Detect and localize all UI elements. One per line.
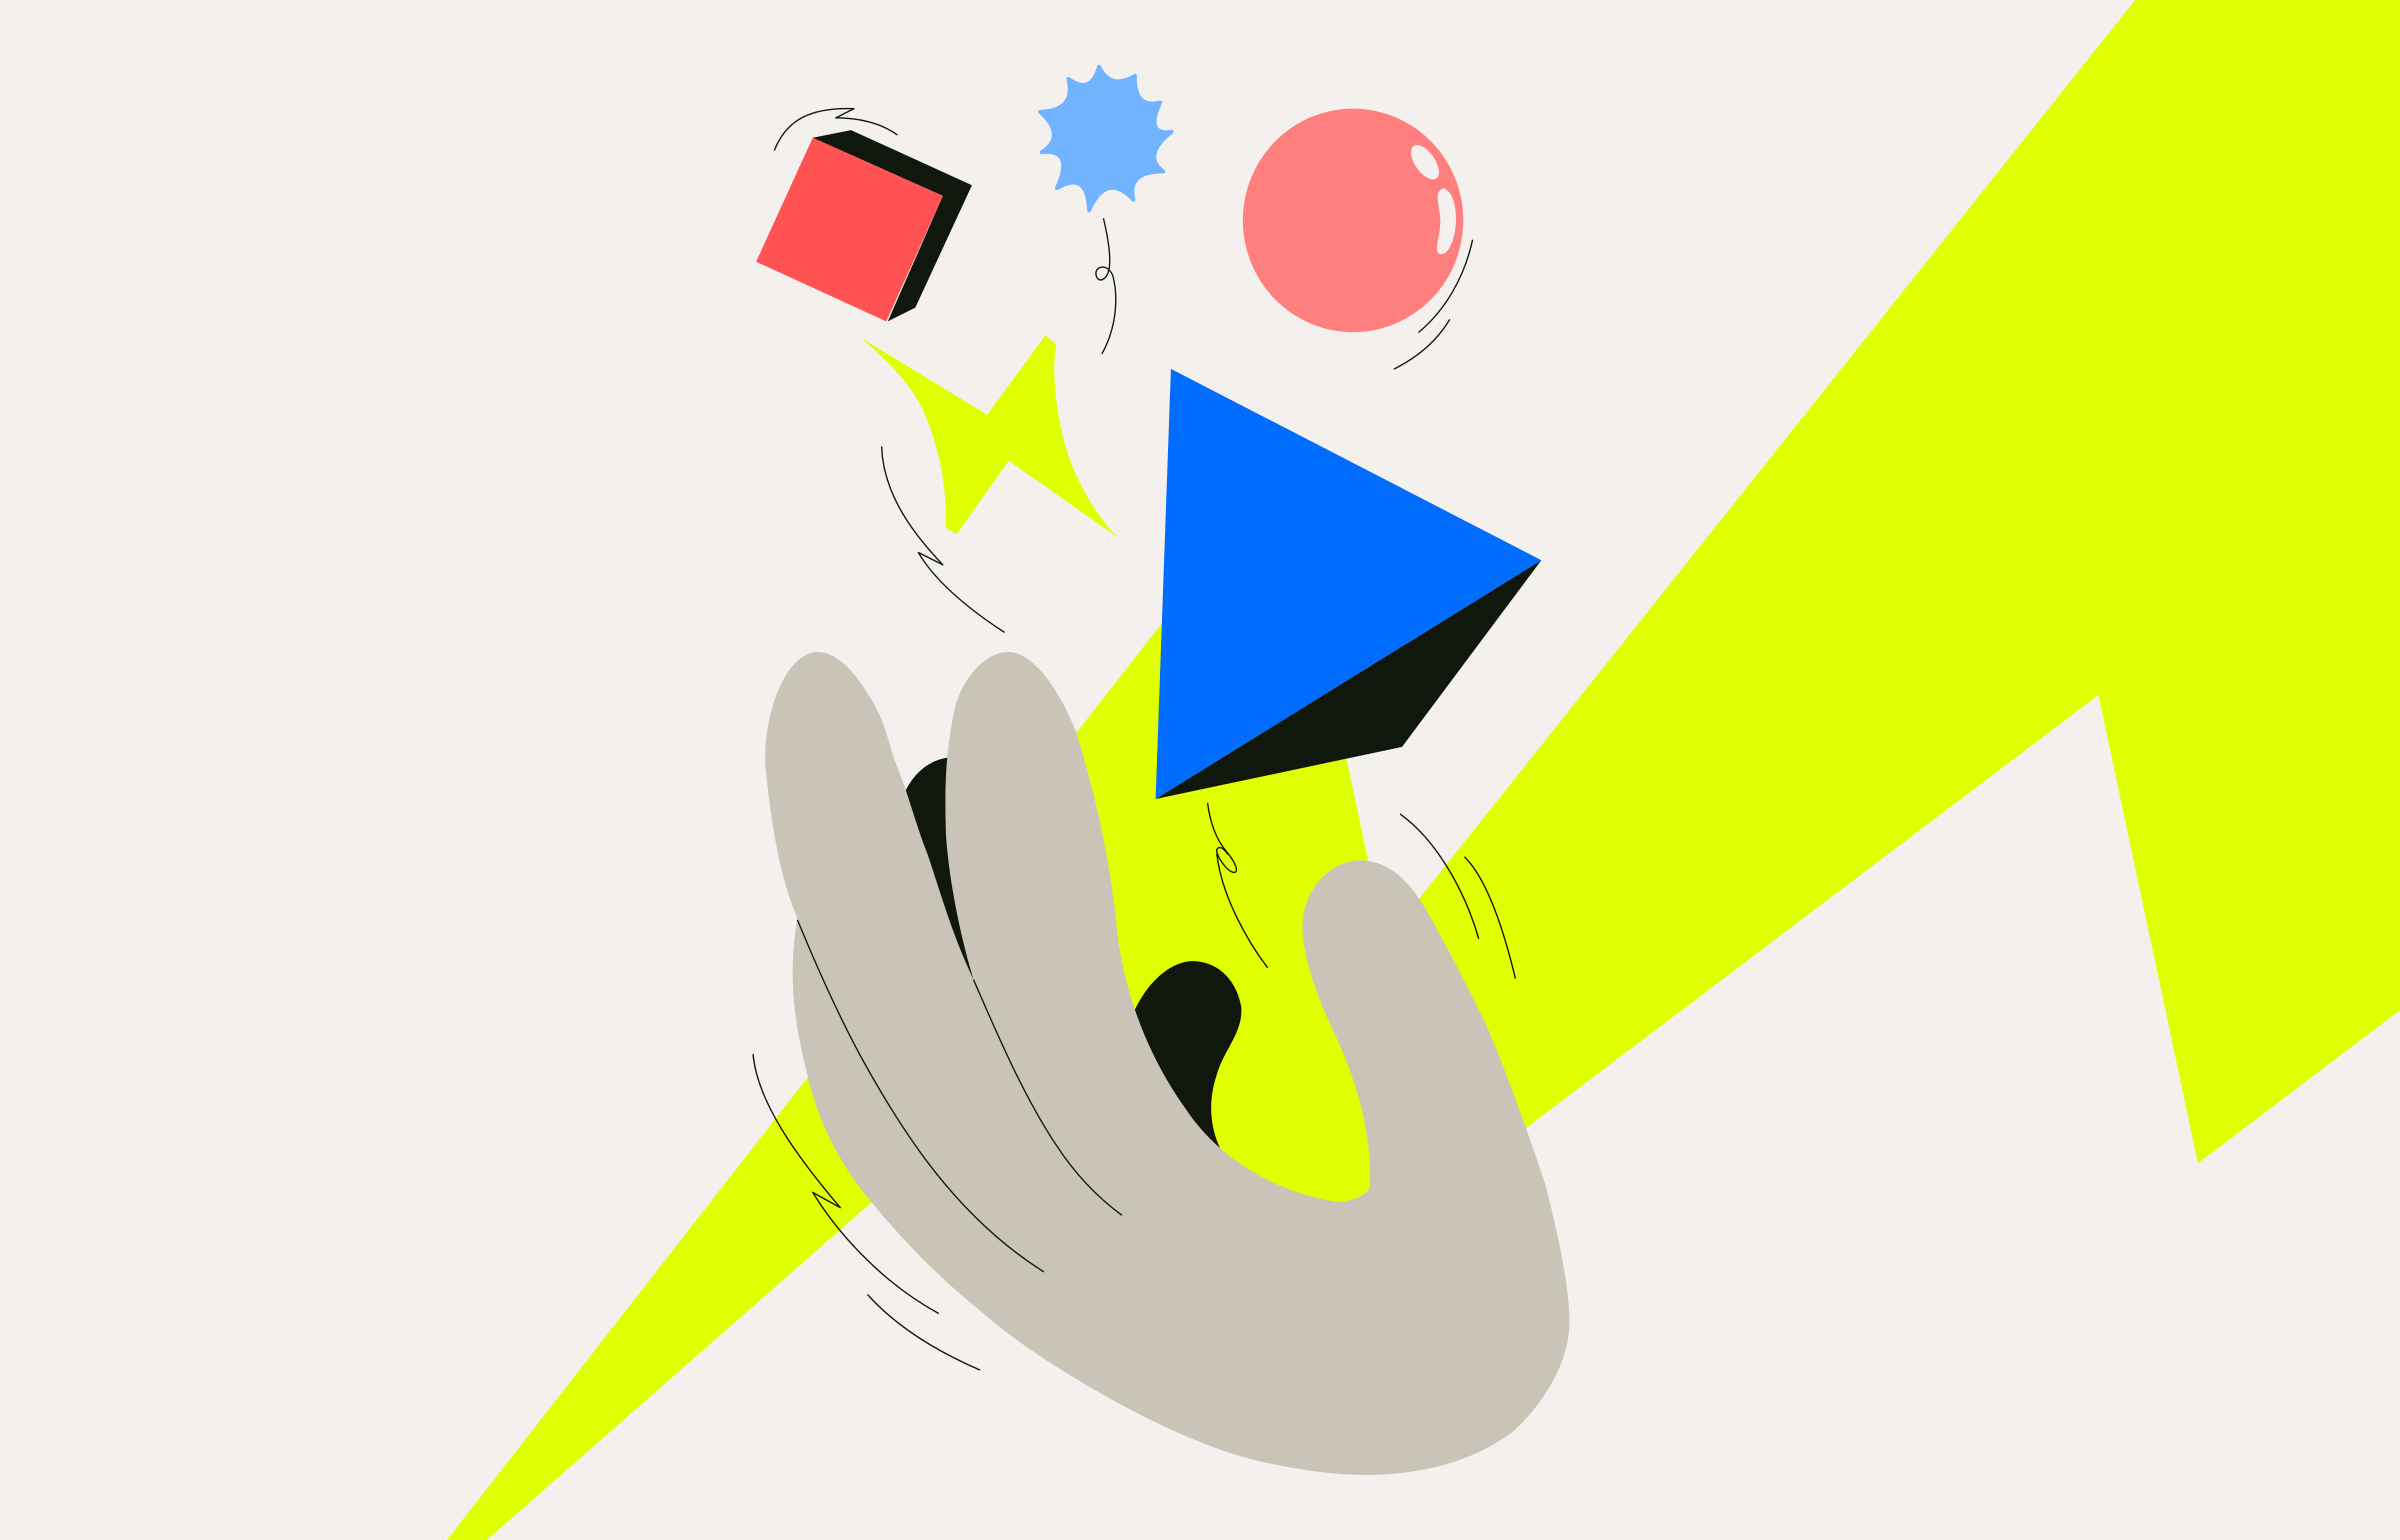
motion line: small bolt — [882, 447, 1004, 632]
small yellow lightning bolt — [862, 335, 1117, 537]
motion lines: lower left — [753, 1055, 980, 1370]
motion lines — [753, 109, 1515, 1370]
pink sphere — [1243, 109, 1463, 332]
motion lines: thumb — [1401, 814, 1515, 978]
motion lines: sphere — [1394, 240, 1472, 369]
blue starburst — [1040, 67, 1172, 210]
dark gaps between fingers — [903, 758, 1241, 1157]
hand — [765, 652, 1569, 1475]
finger lines — [797, 920, 1122, 1272]
blue triangle with dark facet — [1156, 369, 1541, 799]
motion line: cube — [774, 109, 897, 150]
motion line: triangle — [1208, 804, 1267, 967]
red cube — [756, 130, 972, 321]
motion line: starburst — [1096, 219, 1116, 354]
